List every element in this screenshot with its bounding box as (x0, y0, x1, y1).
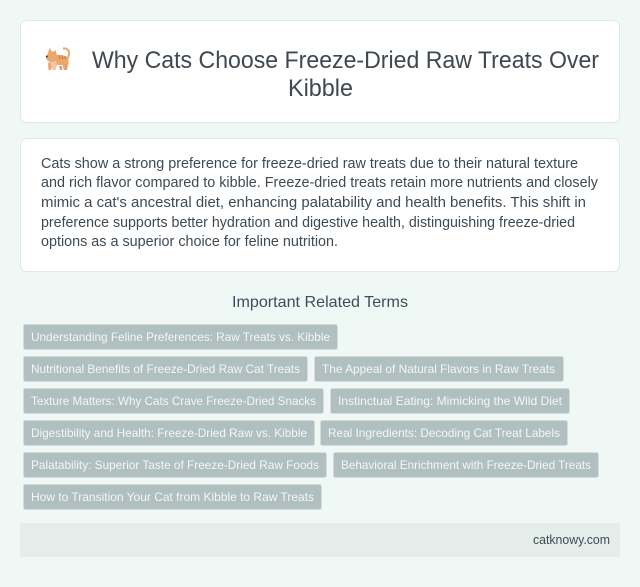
tag: Real Ingredients: Decoding Cat Treat Labels (328, 426, 560, 440)
tag (334, 452, 598, 478)
tag (24, 484, 322, 510)
tag: Instinctual Eating: Mimicking the Wild Diet (338, 394, 563, 408)
text block: summary: mimic a cat's ancestral diet, enhancing palatability and health benefits. This shift in (41, 195, 586, 211)
tag: Understanding Feline Preferences: Raw Treats vs. Kibble (31, 330, 330, 344)
footer (20, 523, 620, 557)
tag: The Appeal of Natural Flavors in Raw Treats (322, 362, 555, 376)
text block: summary: options as a superior choice for feline nutrition. (41, 234, 338, 250)
tag (330, 388, 570, 414)
tag: Texture Matters: Why Cats Crave Freeze-Dried Snacks (31, 394, 316, 408)
tag (24, 356, 308, 382)
tag (24, 420, 314, 446)
tag list (24, 324, 598, 510)
heading: important related terms: Important Related Terms (232, 294, 408, 311)
text block: summary (41, 156, 599, 250)
tag (320, 420, 568, 446)
tag: Palatability: Superior Taste of Freeze-Dried Raw Foods (31, 458, 319, 472)
title (92, 47, 599, 102)
title: Kibble (288, 75, 353, 102)
panel: summary paragraph (20, 138, 620, 272)
panel: title card (20, 20, 620, 122)
tag (314, 356, 564, 382)
text block: summary: preference supports better hydration and digestive health, distinguishing freeze-dried (41, 215, 575, 231)
text block: summary: Cats show a strong preference for freeze-dried raw treats due to their natural texture (41, 156, 578, 172)
tag (24, 324, 338, 350)
tag (24, 452, 326, 478)
icon: cat (46, 48, 69, 70)
title: Why Cats Choose Freeze-Dried Raw Treats Over (92, 47, 599, 74)
tag (24, 388, 324, 414)
text block: summary: and rich flavor compared to kibble. Freeze-dried treats retain more nutrients and closely (41, 175, 599, 191)
tag: How to Transition Your Cat from Kibble to Raw Treats (31, 490, 314, 504)
tag: Digestibility and Health: Freeze-Dried Raw vs. Kibble (31, 426, 307, 440)
footer text: catknowy.com (533, 533, 610, 547)
tag: Nutritional Benefits of Freeze-Dried Raw Cat Treats (31, 362, 300, 376)
tag: Behavioral Enrichment with Freeze-Dried Treats (341, 458, 591, 472)
